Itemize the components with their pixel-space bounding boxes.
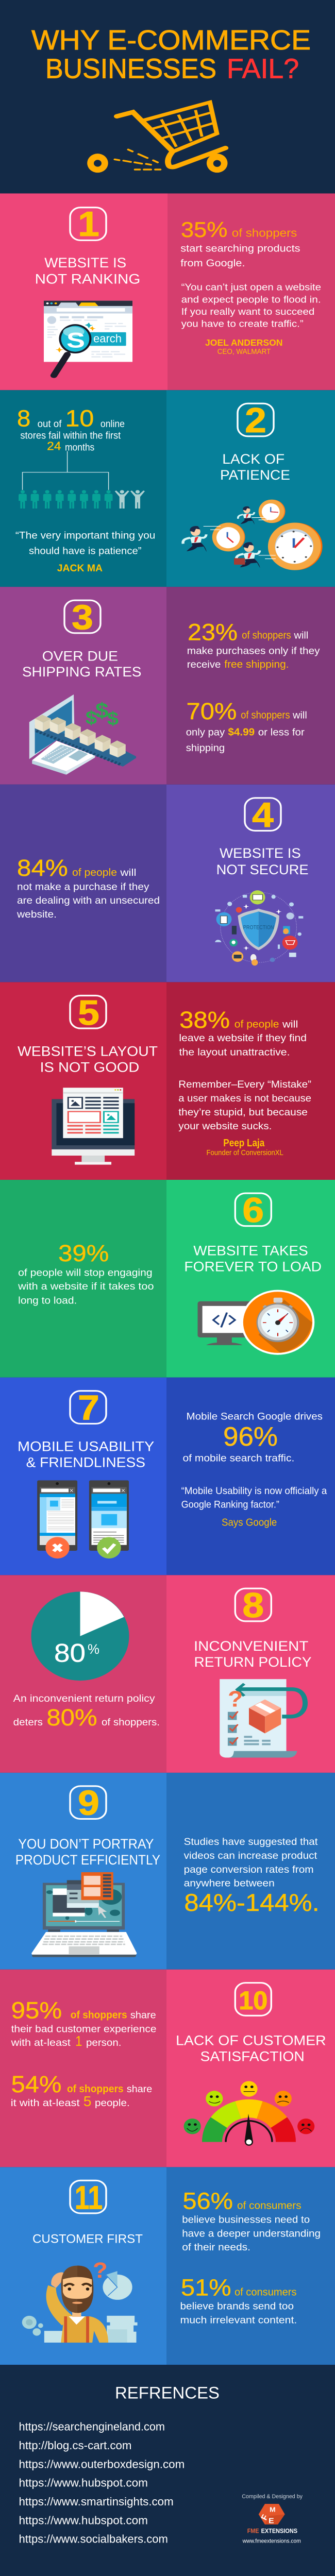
- quote: If you really want to succeed: [181, 307, 314, 317]
- icon: protection shield: PROTECTION: [243, 924, 274, 930]
- quote: Google Ranking factor.”: [181, 1499, 279, 1510]
- title: WHY E-COMMERCE: [31, 25, 311, 56]
- quote: Says Google: [222, 1517, 277, 1528]
- title: BUSINESSES: [45, 53, 216, 84]
- stat: 51 percent: of consumers: [234, 2286, 297, 2298]
- pie chart: 80 percent: 80: [54, 1639, 86, 1668]
- stat: 39 percent: 39%: [58, 1241, 109, 1266]
- stat: 39 percent: with a website if it takes too: [18, 1281, 154, 1292]
- stat: 70 percent: [186, 699, 307, 754]
- faces: [184, 2081, 314, 2134]
- number badge 9: [70, 1784, 106, 1823]
- section 1: website is not ranking: [0, 193, 335, 390]
- stat: 54 percent: share: [127, 2083, 152, 2095]
- stat: 35 percent: start searching products: [180, 243, 300, 254]
- section 5: website's layout: [0, 982, 335, 1180]
- icon: search browser window: earch: [93, 332, 122, 345]
- heading: FOREVER TO LOAD: [184, 1259, 322, 1274]
- number badge 1: [70, 205, 106, 244]
- stat: 54 percent: 5: [83, 2093, 91, 2110]
- stat: 95 percent: [11, 1997, 156, 2049]
- panel: section 6 right: [166, 1180, 335, 1378]
- stat: 54 percent: [11, 2072, 152, 2110]
- attribution: CEO, WALMART: [217, 348, 271, 356]
- attribution: JOEL ANDERSON: [205, 337, 282, 348]
- stat text: 80%: [46, 1705, 97, 1731]
- title: [31, 25, 311, 84]
- stat: 56 percent: of their needs.: [182, 2242, 250, 2253]
- icon: protection shield: [215, 890, 303, 965]
- stat: 51 percent: believe brands send too: [180, 2301, 294, 2312]
- stat: 8 out of 10: 8: [17, 405, 30, 432]
- icon: laptop conveyor with boxes: [29, 694, 136, 775]
- stat: 8 out of 10: online: [100, 418, 125, 430]
- stat: 95 percent: 95%: [11, 1997, 62, 2024]
- stat: 84 percent: not make a purchase if they: [17, 881, 149, 892]
- stat: 51 percent: [180, 2275, 297, 2326]
- panel: section 6 left: [0, 1180, 166, 1378]
- stat: 8 out of 10: out of: [38, 418, 62, 430]
- stat: 54 percent: it with at-least: [11, 2097, 80, 2109]
- icon: return document with parcel: ?: [228, 1686, 243, 1711]
- heading: WEBSITE TAKES: [193, 1243, 308, 1258]
- stat: 70 percent: of shoppers: [241, 709, 290, 721]
- stat text: An inconvenient return policy: [13, 1693, 155, 1704]
- icon: monitor with page layout: [52, 1088, 135, 1165]
- section 7: mobile usability: [0, 1378, 335, 1575]
- heading: YOU DON’T PORTRAY: [18, 1836, 154, 1852]
- stat: 70 percent: 70%: [187, 699, 237, 725]
- stat: 56 percent: have a deeper understanding: [182, 2228, 321, 2239]
- heading: [220, 451, 290, 483]
- heading: [176, 2032, 326, 2064]
- section 9: you don't portray product efficiently: [0, 1773, 335, 1970]
- quote: and expect people to flood in.: [181, 294, 321, 305]
- reference links: https://www.socialbakers.com: [19, 2533, 168, 2545]
- heading: LACK OF CUSTOMER: [176, 2032, 326, 2048]
- heading: MOBILE USABILITY: [18, 1438, 154, 1454]
- panel: section 8 left: [0, 1575, 166, 1773]
- reference links: https://www.smartinsights.com: [19, 2495, 174, 2508]
- heading: RETURN POLICY: [194, 1654, 312, 1670]
- credit: FME Extensions logo: EXTENSIONS: [261, 2527, 297, 2534]
- panel: section 3 left: [0, 587, 166, 785]
- number badge 6: 6: [242, 1191, 264, 1230]
- icon: search browser window: S: [66, 328, 85, 352]
- reference links: https://www.hubspot.com: [19, 2477, 148, 2489]
- stat: 38 percent: of people: [234, 1019, 279, 1030]
- title: FAIL?: [227, 53, 299, 84]
- stat text: 84%-144%.: [184, 1889, 320, 1917]
- heading: SHIPPING RATES: [22, 664, 142, 680]
- attribution: [205, 337, 282, 356]
- stat text: [184, 1836, 320, 1917]
- icon: broken shopping cart: [87, 102, 228, 173]
- heading: NOT RANKING: [35, 271, 140, 286]
- heading: [194, 1638, 312, 1670]
- pie chart: 80 percent: %: [88, 1641, 99, 1657]
- section 6: website takes forever to load: [0, 1180, 335, 1378]
- panel: section 10 left: [0, 1970, 166, 2167]
- number badge 3: [64, 598, 100, 637]
- panel: section 2 right: [166, 390, 335, 587]
- reference links: [19, 2420, 185, 2545]
- credit: FME Extensions logo: [242, 2493, 303, 2544]
- stat: 56 percent: 56%: [183, 2188, 233, 2214]
- section 2: lack of patience: [0, 390, 335, 587]
- icon: return document with parcel: [220, 1679, 305, 1758]
- icon: laptop conveyor with boxes: $: [86, 707, 97, 728]
- icon: laptop conveyor with boxes: $: [107, 708, 119, 730]
- stat text: of shoppers.: [102, 1717, 160, 1728]
- chart: 8 of 10 people: [19, 451, 145, 509]
- section 11: customer first: [0, 2167, 335, 2365]
- number badge 6: [235, 1191, 271, 1230]
- footer: references: [19, 2384, 303, 2545]
- icon: satisfaction gauge with faces: [184, 2081, 314, 2146]
- heading: [22, 648, 141, 680]
- number badge 5: [70, 993, 106, 1032]
- panel: section 10 right: [166, 1970, 335, 2167]
- stat: 23 percent: [187, 619, 320, 670]
- quote: “The very important thing you: [15, 530, 155, 541]
- stat: 23 percent: free shipping.: [224, 659, 289, 670]
- heading: CUSTOMER FIRST: [32, 2232, 143, 2246]
- stat: 8 out of 10: months: [65, 442, 94, 453]
- panel: section 8 right: [166, 1575, 335, 1773]
- stat text: [13, 1693, 160, 1731]
- number badge 1: 1: [78, 205, 99, 244]
- credit: FME Extensions logo: Compiled & Designed by: [242, 2493, 303, 2500]
- quote: a user makes is not because: [178, 1093, 311, 1104]
- stat: 95 percent: of shoppers: [71, 2009, 127, 2021]
- number badge 9: 9: [78, 1784, 99, 1823]
- credit: FME Extensions logo: FME: [247, 2527, 259, 2534]
- icon: two phones, bad and good: [37, 1480, 129, 1558]
- panel: section 9 left: [0, 1773, 166, 1970]
- stat: 84 percent: of people: [72, 867, 117, 878]
- reference links: https://www.outerboxdesign.com: [19, 2458, 185, 2470]
- icon: running men and clocks: [183, 500, 323, 570]
- heading: IS NOT GOOD: [40, 1059, 139, 1075]
- panel: section 1 right: [167, 193, 335, 390]
- heading: [18, 1043, 158, 1075]
- stat: 70 percent: will: [292, 709, 307, 721]
- pie chart: 80 percent: [31, 1591, 129, 1681]
- stat: 23 percent: 23%: [188, 619, 238, 646]
- quote: Remember–Every “Mistake”: [178, 1079, 311, 1090]
- stat: 70 percent: $4.99: [228, 726, 255, 738]
- stat: 23 percent: receive: [187, 659, 221, 670]
- quote: “You can’t just open a website: [181, 282, 321, 293]
- stat: 23 percent: make purchases only if they: [187, 646, 320, 656]
- stat: 95 percent: their bad customer experience: [11, 2023, 156, 2035]
- stat: 56 percent: of consumers: [237, 2200, 301, 2211]
- stat: 23 percent: of shoppers: [242, 630, 291, 641]
- number badge 11: 11: [75, 2179, 103, 2216]
- number badge 8: [235, 1586, 271, 1625]
- quote: [181, 1485, 327, 1528]
- number badge 5: 5: [78, 993, 99, 1032]
- stat text: Studies have suggested that: [184, 1836, 318, 1848]
- heading: [15, 1836, 160, 1868]
- heading: PRODUCT EFFICIENTLY: [15, 1852, 160, 1868]
- panel: section 11 left: [0, 2167, 166, 2365]
- heading: & FRIENDLINESS: [26, 1454, 145, 1470]
- stat: 35 percent: from Google.: [180, 258, 245, 269]
- stat: 84 percent: are dealing with an unsecured: [17, 895, 160, 906]
- heading: WEBSITE IS: [220, 845, 301, 861]
- attribution: Peep Laja: [223, 1138, 265, 1149]
- panel: section 5 left: [0, 982, 166, 1180]
- heading: WEBSITE’S LAYOUT: [18, 1043, 158, 1059]
- section 10: lack of customer satisfaction: [0, 1970, 335, 2167]
- credit: FME Extensions logo: www.fmeextensions.com: [242, 2538, 301, 2544]
- icon: confused bearded man: [22, 2258, 138, 2343]
- stat: 96 percent: of mobile search traffic.: [183, 1452, 294, 1464]
- stat: 38 percent: the layout unattractive.: [179, 1046, 290, 1058]
- gauge: [202, 2099, 296, 2146]
- stat: 96 percent: Mobile Search Google drives: [187, 1411, 323, 1422]
- stat: 54 percent: people.: [95, 2097, 130, 2109]
- icon: laptop showing product video: [31, 1872, 137, 1957]
- stat: 38 percent: [179, 1007, 307, 1058]
- header: [31, 25, 311, 173]
- panel: section 4 right: [166, 785, 335, 982]
- credit: FME Extensions logo: E: [269, 2517, 274, 2526]
- stat: 56 percent: [182, 2188, 321, 2253]
- stat: 8 out of 10: [17, 405, 125, 453]
- heading: PATIENCE: [220, 467, 290, 483]
- stat text: deters: [13, 1717, 43, 1728]
- quote: JACK MA: [57, 563, 103, 574]
- heading: LACK OF: [222, 451, 284, 467]
- panel: section 4 left: [0, 785, 166, 982]
- stat: 8 out of 10: stores fail within the first: [20, 430, 121, 441]
- stat: 70 percent: only pay: [186, 726, 225, 738]
- heading: NOT SECURE: [216, 861, 309, 877]
- icon: search browser window: [44, 301, 132, 376]
- stat: 84 percent: will: [120, 867, 137, 878]
- quote: your website sucks.: [178, 1121, 272, 1132]
- heading: [18, 1438, 154, 1470]
- heading: [35, 255, 140, 286]
- stat: 39 percent: of people will stop engaging: [18, 1267, 153, 1278]
- number badge 4: [245, 795, 281, 835]
- panel: section 7 right: [166, 1378, 335, 1575]
- stat: 39 percent: [18, 1241, 154, 1306]
- stat: 23 percent: will: [294, 630, 308, 641]
- icon: confused bearded man: ?: [93, 2258, 108, 2282]
- number badge 2: [238, 401, 274, 440]
- number badge 3: 3: [72, 598, 93, 637]
- number badge 8: 8: [242, 1586, 264, 1625]
- quote: [181, 282, 321, 329]
- heading: OVER DUE: [42, 648, 118, 664]
- panel: section 3 right: [166, 587, 335, 785]
- attribution: [206, 1138, 283, 1157]
- stat: 39 percent: long to load.: [18, 1295, 77, 1306]
- number badge 7: [70, 1388, 106, 1428]
- panel: section 2 left: [0, 390, 166, 587]
- heading: INCONVENIENT: [194, 1638, 308, 1654]
- stat text: page conversion rates from: [184, 1864, 314, 1875]
- stat: 84 percent: [16, 855, 160, 920]
- credit: FME Extensions logo: M: [270, 2506, 276, 2513]
- quote: [15, 530, 155, 574]
- stat: 95 percent: share: [130, 2009, 156, 2021]
- reference links: http://blog.cs-cart.com: [19, 2439, 131, 2452]
- section 4: website is not secure: [0, 785, 335, 982]
- stat: 95 percent: person.: [86, 2037, 121, 2048]
- stat: 70 percent: shipping: [186, 742, 225, 754]
- icon: monitor and stopwatch: [197, 1290, 314, 1355]
- stat: 96 percent: [183, 1411, 323, 1464]
- stat: 84 percent: website.: [16, 909, 57, 920]
- quote: [178, 1079, 311, 1132]
- attribution: Founder of ConversionXL: [206, 1148, 283, 1157]
- panel: section 5 right: [166, 982, 335, 1180]
- stat: 8 out of 10: 24: [47, 439, 61, 453]
- stat: 54 percent: of shoppers: [67, 2083, 124, 2095]
- section 8: inconvenient return policy: [0, 1575, 335, 1773]
- heading: WEBSITE IS: [44, 255, 126, 270]
- panel: section 7 left: [0, 1378, 166, 1575]
- stat: 35 percent: 35%: [181, 218, 228, 242]
- quote: you have to create traffic.”: [181, 318, 304, 329]
- stat: 54 percent: 54%: [11, 2072, 61, 2098]
- reference links: https://searchengineland.com: [19, 2420, 165, 2433]
- stat text: videos can increase product: [184, 1850, 317, 1861]
- panel: section 11 right: [166, 2167, 335, 2365]
- panel: section 1 left: [0, 193, 167, 390]
- heading: [216, 845, 309, 877]
- stat text: anywhere between: [184, 1877, 275, 1889]
- quote: they’re stupid, but because: [178, 1107, 308, 1118]
- icon: laptop conveyor with boxes: $: [95, 699, 109, 723]
- stat: 56 percent: believe businesses need to: [182, 2214, 310, 2225]
- heading: refrences: REFRENCES: [115, 2384, 220, 2402]
- number badge 10: 10: [239, 1986, 267, 2015]
- stat: 38 percent: will: [282, 1019, 298, 1030]
- heading: [184, 1243, 322, 1274]
- stat: 38 percent: 38%: [179, 1007, 230, 1033]
- number badge 2: 2: [245, 401, 266, 440]
- credit: FME Extensions logo: F: [259, 2513, 271, 2522]
- quote: should have is patience”: [29, 546, 142, 556]
- reference links: https://www.hubspot.com: [19, 2514, 148, 2527]
- stat: 96 percent: 96%: [223, 1421, 278, 1452]
- panel: section 9 right: [166, 1773, 335, 1970]
- stat: 95 percent: with at-least: [11, 2037, 71, 2048]
- heading: SATISFACTION: [200, 2048, 305, 2064]
- stat: 95 percent: 1: [75, 2033, 82, 2049]
- stat: 35 percent: of shoppers: [232, 227, 297, 239]
- stat: 38 percent: leave a website if they find: [179, 1032, 307, 1044]
- stat: 70 percent: or less for: [258, 726, 305, 738]
- stat: 8 out of 10: 10: [65, 405, 94, 432]
- stat: 35 percent: [180, 218, 300, 269]
- stat: 51 percent: much irrelevant content.: [180, 2315, 297, 2326]
- stat: 84 percent: 84%: [17, 855, 68, 881]
- number badge 7: 7: [78, 1388, 99, 1428]
- stat: 51 percent: 51%: [181, 2275, 231, 2301]
- number badge 4: 4: [252, 795, 274, 835]
- section 3: over due shipping rates: [0, 587, 335, 785]
